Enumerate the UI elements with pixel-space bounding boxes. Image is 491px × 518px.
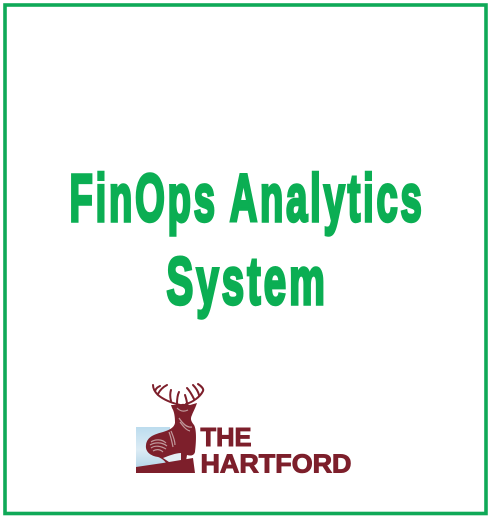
logo: The Hartford <box>136 384 352 478</box>
title: System <box>166 243 325 318</box>
logo wordmark: HARTFORD <box>200 448 352 478</box>
title <box>70 161 422 318</box>
logo wordmark <box>200 422 352 478</box>
belly gap <box>163 453 181 462</box>
antlers <box>153 384 203 405</box>
logo wordmark: THE <box>200 422 252 452</box>
title: FinOps Analytics <box>70 161 422 236</box>
markings <box>150 408 192 452</box>
icon: stag on a hill <box>136 384 203 473</box>
